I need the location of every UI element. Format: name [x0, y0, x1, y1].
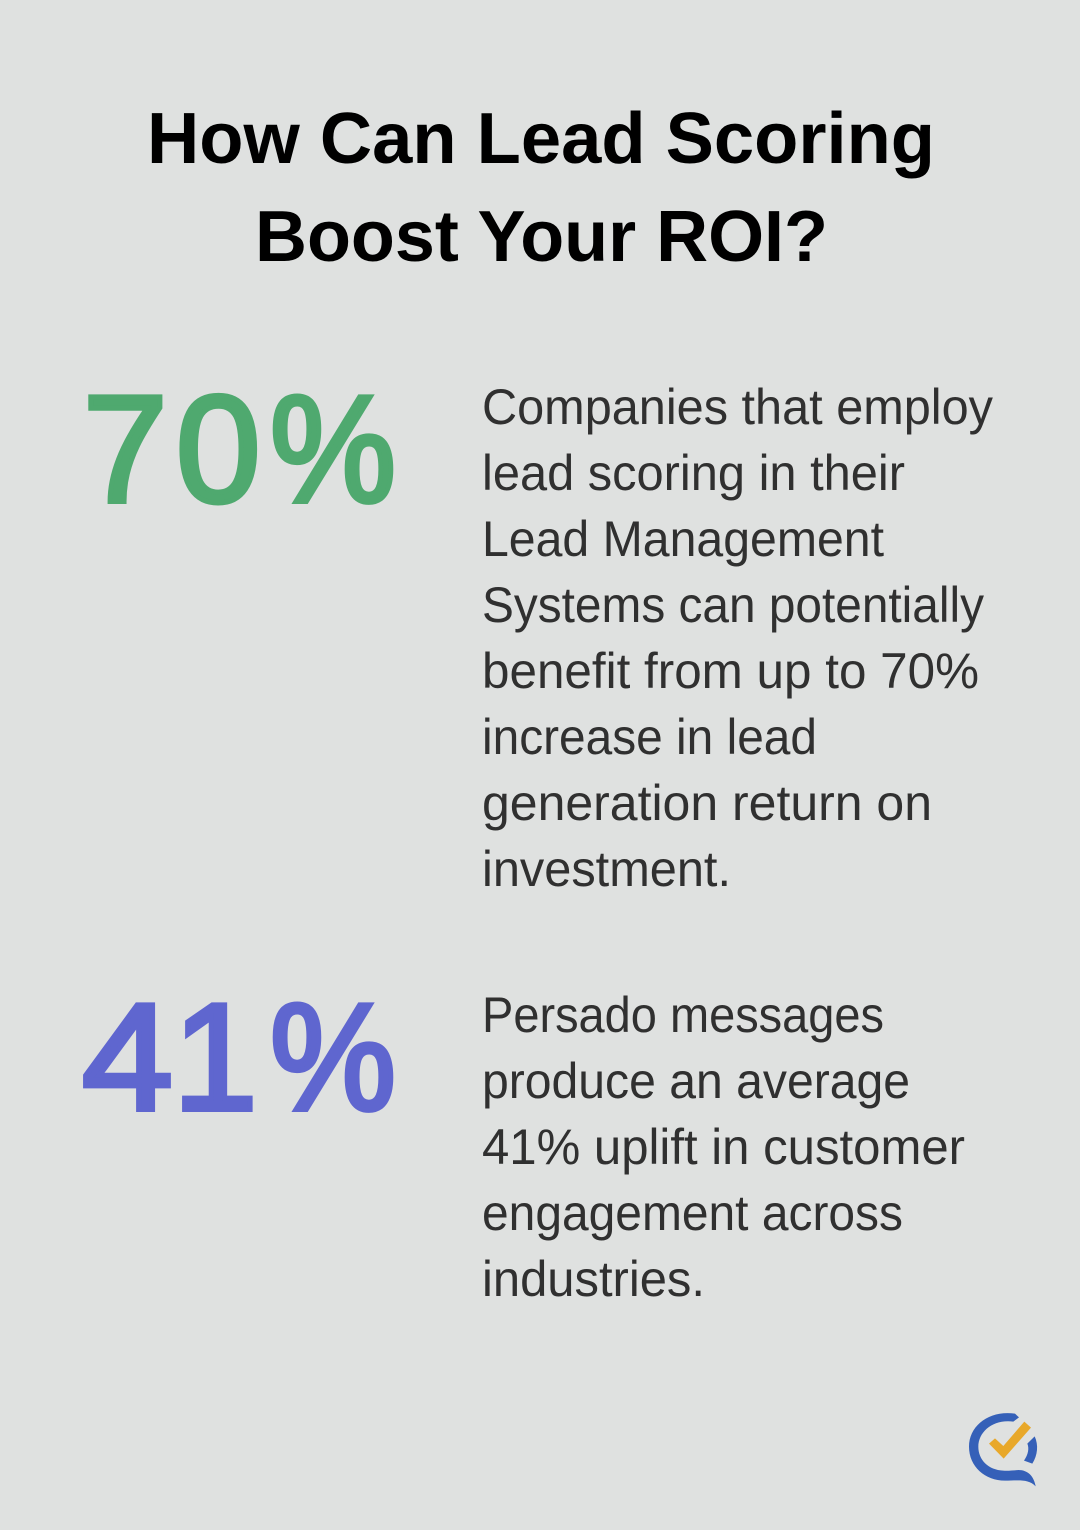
text block: lead scoring description: lead scoring in their	[482, 445, 905, 501]
text block: Persado description: Persado messages	[482, 987, 884, 1043]
stat: 70%: %	[270, 364, 396, 534]
stat: 70%: 70	[83, 364, 261, 534]
stat: 41%: 4	[82, 972, 173, 1142]
text block: lead scoring description: Companies that employ	[482, 379, 993, 435]
text block: lead scoring description: increase in lead	[482, 709, 817, 765]
title	[147, 99, 935, 277]
stat: 70%	[83, 364, 396, 534]
text block: Persado description: engagement across	[482, 1185, 903, 1241]
text block: Persado description	[482, 987, 965, 1307]
stat: 41%: 1	[173, 972, 258, 1142]
stat: 41%: %	[270, 972, 396, 1142]
text block: Persado description: 41% uplift in customer	[482, 1119, 965, 1175]
title: Boost Your ROI?	[255, 197, 828, 277]
text block: lead scoring description: Lead Management	[482, 511, 884, 567]
text block: lead scoring description: investment.	[482, 841, 731, 897]
text block: Persado description: produce an average	[482, 1053, 910, 1109]
text block: lead scoring description: Systems can potentially	[482, 577, 984, 633]
stat: 41%	[82, 972, 396, 1142]
text block: Persado description: industries.	[482, 1251, 705, 1307]
text block: lead scoring description: benefit from up to 70%	[482, 643, 979, 699]
text block: lead scoring description	[482, 379, 993, 897]
text block: lead scoring description: generation return on	[482, 775, 932, 831]
icon: logo chat bubble with check mark	[969, 1413, 1037, 1486]
title: How Can Lead Scoring	[147, 99, 935, 179]
